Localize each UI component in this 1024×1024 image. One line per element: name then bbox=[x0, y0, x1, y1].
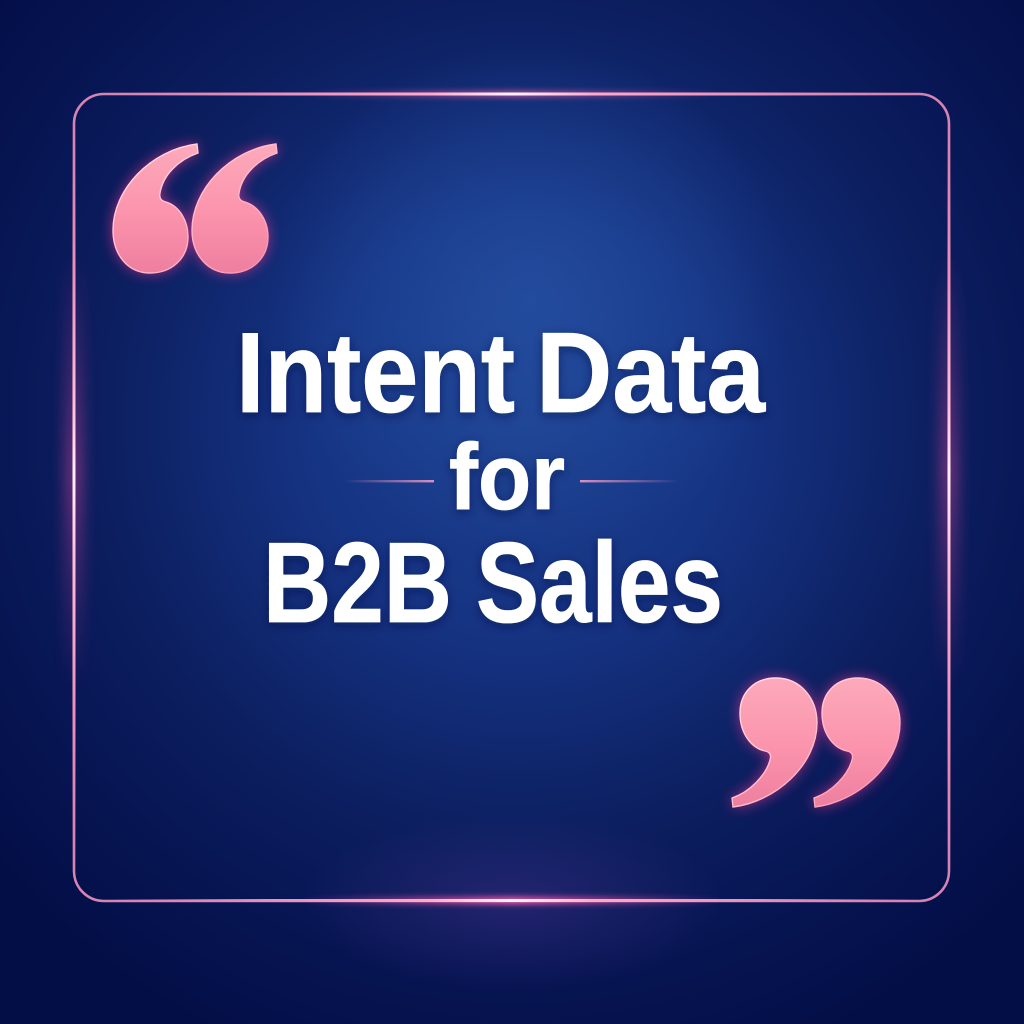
title line: Intent Data bbox=[236, 310, 766, 437]
frame glow bbox=[67, 91, 956, 992]
divider left of for bbox=[344, 480, 434, 482]
divider right of for bbox=[580, 480, 680, 482]
icon: opening quotation mark bbox=[113, 144, 277, 273]
title line: B2B Sales: Sales bbox=[476, 520, 723, 647]
panel frame bbox=[72, 92, 950, 902]
title line: B2B Sales bbox=[263, 520, 723, 647]
title line: B2B Sales: B2B bbox=[263, 520, 452, 647]
title line: Intent Data: Intent bbox=[236, 310, 515, 437]
title bbox=[236, 310, 766, 647]
title line: for: for bbox=[449, 424, 565, 529]
icon: closing quotation mark bbox=[732, 678, 900, 807]
title line: Intent Data: Data bbox=[536, 310, 766, 437]
